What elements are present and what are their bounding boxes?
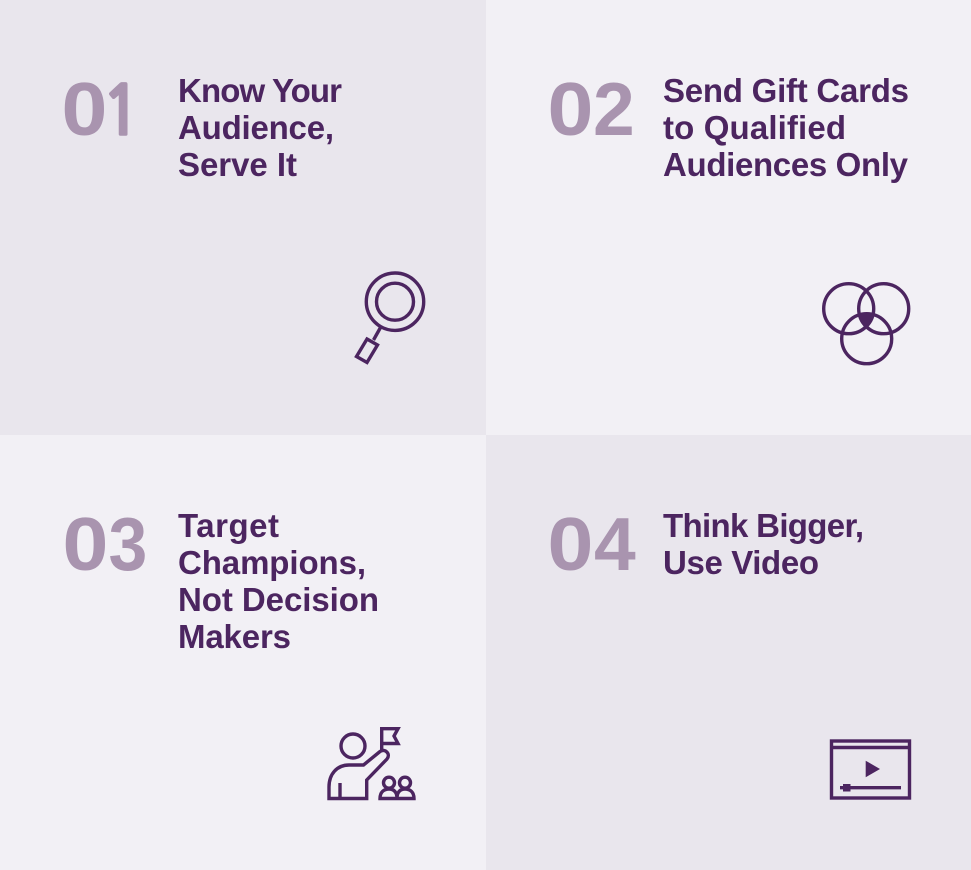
icon: magnifying glass — [356, 273, 424, 362]
panel: 04 think bigger — [486, 435, 971, 870]
icon: video player — [832, 741, 910, 798]
number 02: 2 — [593, 67, 635, 151]
heading 03: Makers — [178, 618, 291, 655]
number 03: 0 — [62, 502, 108, 586]
number 03 — [62, 502, 147, 587]
number 01: 0 — [62, 67, 107, 151]
heading 03: Target — [178, 507, 279, 544]
number 03: 3 — [108, 503, 147, 587]
icon: venn diagram — [824, 284, 909, 364]
heading 04: Think Bigger, — [663, 507, 864, 544]
heading 01: Know Your — [178, 72, 342, 109]
heading 03: Not Decision — [178, 581, 379, 618]
heading 02: to Qualified — [663, 109, 846, 146]
icon: person with flag and small group — [329, 729, 414, 798]
heading 02 — [663, 72, 909, 183]
panel: 02 send gift cards — [550, 78, 910, 366]
heading 02: Audiences Only — [663, 146, 909, 183]
number 04: 0 — [548, 502, 593, 586]
heading 03: Champions, — [178, 544, 366, 581]
panel: 01 know your audience — [0, 0, 486, 435]
heading 01: Serve It — [178, 146, 297, 183]
heading 02: Send Gift Cards — [663, 72, 909, 109]
heading 04 — [663, 507, 864, 581]
number 04 — [548, 502, 636, 586]
heading 04: Use Video — [663, 544, 819, 581]
number 04: 4 — [594, 502, 636, 586]
number 02 — [548, 67, 635, 151]
number 01: 1 — [101, 79, 142, 146]
heading 01: Audience, — [178, 109, 334, 146]
heading 03 — [178, 507, 379, 655]
heading 01 — [178, 72, 342, 183]
number 01 — [62, 67, 142, 151]
number 02: 0 — [548, 67, 593, 151]
panel: 03 target champions — [0, 435, 486, 870]
